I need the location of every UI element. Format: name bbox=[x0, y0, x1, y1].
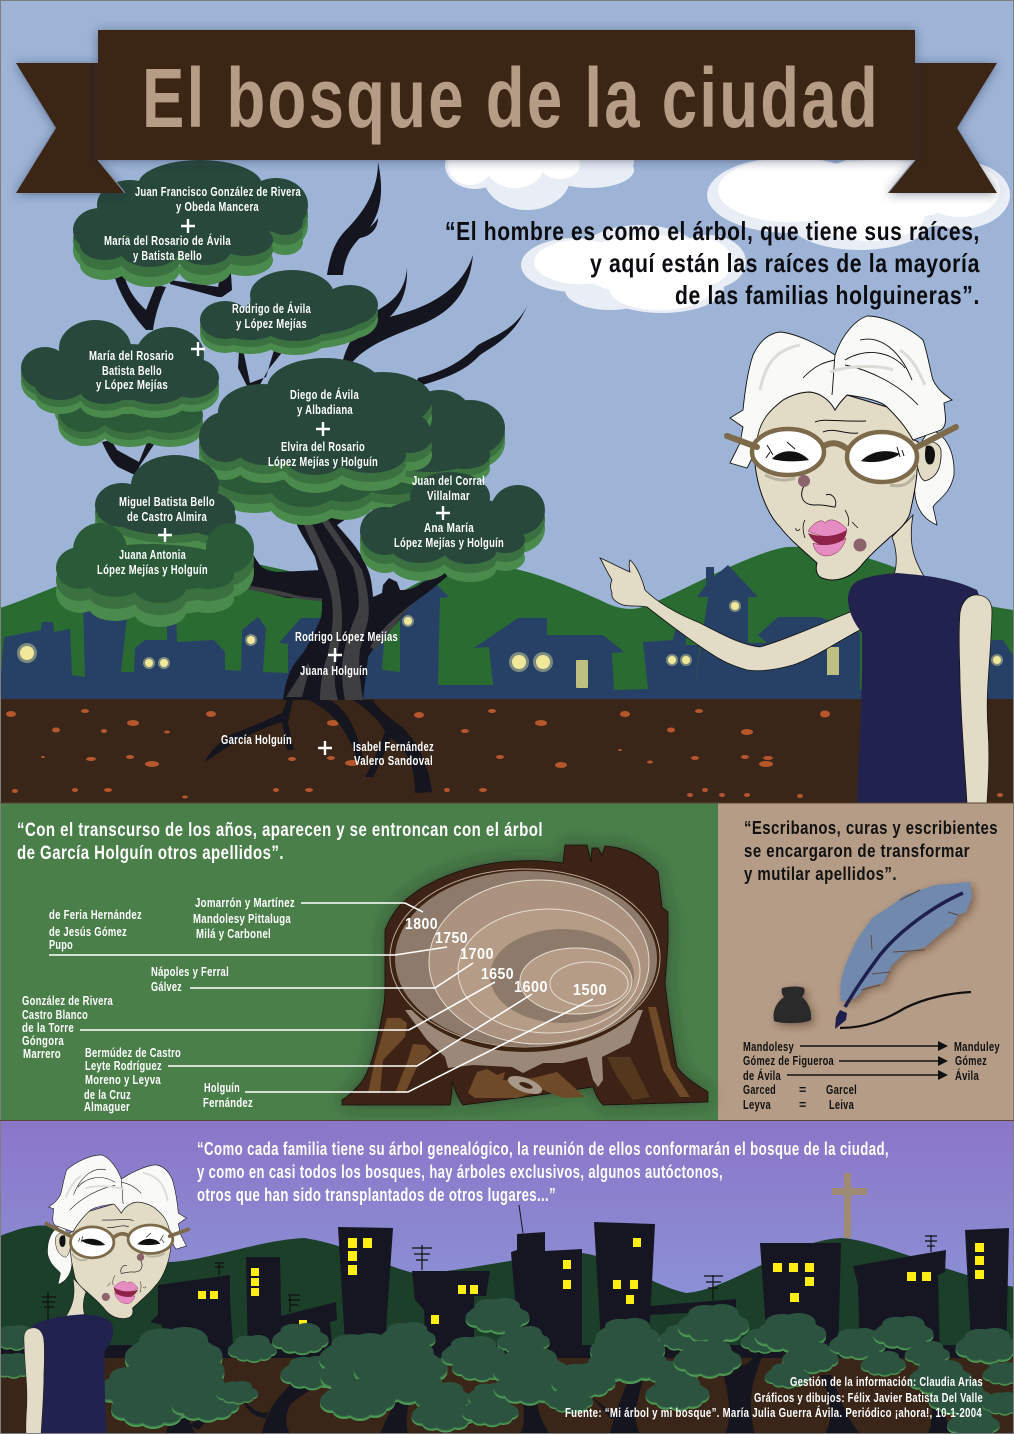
surname mutations bbox=[743, 1040, 1000, 1112]
city: soil bbox=[0, 1358, 1014, 1434]
surname mutations: Manduley bbox=[954, 1040, 1000, 1054]
city: lit windows bbox=[198, 1238, 984, 1329]
city: cross on hill bbox=[832, 1173, 867, 1238]
family tree names: Diego de Ávila bbox=[290, 387, 360, 402]
clouds bbox=[445, 140, 1010, 313]
family tree names: María del Rosario de Ávila bbox=[104, 233, 232, 248]
surname labels: Marrero bbox=[23, 1047, 61, 1061]
house windows bbox=[17, 600, 1003, 688]
city quote: otros que han sido transplantados de otros lugares...” bbox=[197, 1185, 556, 1205]
family tree names: Villalmar bbox=[427, 489, 470, 503]
surname labels: Almaguer bbox=[84, 1100, 130, 1114]
surname mutations: = bbox=[799, 1083, 807, 1097]
ring years: 1600 bbox=[514, 979, 548, 996]
surname mutations: Gómez de Figueroa bbox=[743, 1054, 834, 1068]
surname mutations: Leyva bbox=[743, 1098, 771, 1112]
hills bbox=[0, 547, 1014, 700]
surname labels bbox=[22, 896, 295, 1114]
ring years: 1700 bbox=[460, 946, 494, 963]
surname labels: Gálvez bbox=[151, 980, 182, 994]
family tree names: Miguel Batista Bello bbox=[119, 495, 215, 509]
panel: green stump panel bbox=[0, 803, 718, 1120]
family tree names: y López Mejías bbox=[236, 317, 307, 331]
foliage: Juana Antonia crown bbox=[56, 523, 254, 627]
soil bbox=[0, 699, 1014, 803]
panel: purple city panel bbox=[0, 1121, 1014, 1434]
surname mutations: Garcel bbox=[826, 1083, 857, 1097]
ring years: 1650 bbox=[481, 966, 514, 983]
city quote: y como en casi todos los bosques, hay árboles exclusivos, algunos autóctonos, bbox=[197, 1162, 723, 1182]
family tree names: García Holguín bbox=[221, 733, 292, 747]
surname labels: Jomarrón y Martínez bbox=[195, 896, 295, 910]
family tree names: Juana Antonia bbox=[119, 548, 186, 562]
surname labels: de la Cruz bbox=[84, 1088, 131, 1102]
family tree names: Valero Sandoval bbox=[354, 754, 433, 768]
tan panel heading bbox=[744, 818, 998, 884]
surname leader lines bbox=[49, 903, 593, 1092]
foliage: right crown bbox=[360, 472, 545, 582]
tan panel heading: y mutilar apellidos”. bbox=[744, 864, 897, 884]
surname mutations: Gómez bbox=[955, 1054, 987, 1068]
foliage: left crown bbox=[21, 320, 219, 447]
character: woman pointing bbox=[600, 316, 992, 803]
surname mutations: de Ávila bbox=[743, 1068, 782, 1083]
tan panel heading: se encargaron de transformar bbox=[744, 841, 970, 861]
surname labels: Bermúdez de Castro bbox=[85, 1046, 181, 1060]
soil pebbles bbox=[6, 709, 1003, 798]
ring years: 1800 bbox=[405, 916, 438, 933]
family tree names: López Mejías y Holguín bbox=[394, 536, 504, 550]
city: forest of trees bbox=[0, 1298, 1014, 1434]
surname mutations: Mandolesy bbox=[743, 1040, 794, 1054]
city quote bbox=[197, 1139, 889, 1205]
surname labels: González de Rivera bbox=[22, 994, 114, 1008]
family tree names: Batista Bello bbox=[102, 364, 162, 378]
main quote bbox=[445, 216, 980, 310]
green panel heading bbox=[17, 820, 543, 864]
surname labels: Castro Blanco bbox=[22, 1008, 88, 1022]
surname labels: de Jesús Gómez bbox=[49, 925, 127, 939]
green panel heading: “Con el transcurso de los años, aparecen y se entroncan con el árbol bbox=[17, 820, 543, 841]
family tree names: Juan del Corral bbox=[412, 474, 485, 488]
panel: tan scribes panel bbox=[718, 803, 1014, 1120]
ring years bbox=[405, 916, 607, 999]
ink stroke bbox=[840, 992, 971, 1028]
family tree names: María del Rosario bbox=[89, 349, 174, 363]
family tree names: Ana María bbox=[424, 521, 475, 535]
surname labels: Mandolesy Pittaluga bbox=[193, 912, 292, 926]
family tree names: Juana Holguín bbox=[300, 664, 368, 678]
surname labels: Holguín bbox=[204, 1081, 240, 1095]
tree: trunk, branches and roots bbox=[102, 162, 527, 793]
surname mutations: Leiva bbox=[829, 1098, 854, 1112]
foliage: Rodrigo crown bbox=[200, 270, 378, 355]
foliage: central crown bbox=[199, 358, 505, 525]
surname labels: Fernández bbox=[203, 1096, 253, 1110]
character: woman in city panel bbox=[24, 1155, 188, 1434]
icon: feather and quill bbox=[835, 882, 972, 1029]
family tree names: y López Mejías bbox=[96, 378, 168, 392]
ring years: 1750 bbox=[435, 930, 468, 947]
sky background bbox=[0, 0, 1014, 803]
surname labels: de Feria Hernández bbox=[49, 908, 142, 922]
tree stump bbox=[342, 845, 708, 1105]
surname labels: Moreno y Leyva bbox=[85, 1073, 162, 1087]
family tree names: de Castro Almira bbox=[127, 510, 208, 524]
credits bbox=[565, 1375, 983, 1420]
family tree names: y Albadiana bbox=[297, 403, 354, 417]
title ribbon bbox=[16, 30, 997, 193]
pointing arm bbox=[600, 558, 860, 671]
city: buildings bbox=[0, 1205, 1014, 1360]
surname labels: Nápoles y Ferral bbox=[151, 965, 229, 979]
surname labels: Milá y Carbonel bbox=[196, 927, 271, 941]
ring years: 1500 bbox=[573, 982, 607, 999]
surname mutations: Ávila bbox=[955, 1068, 979, 1083]
foliage: Miguel crown bbox=[95, 455, 236, 552]
family tree names: y Obeda Mancera bbox=[176, 200, 260, 214]
family tree names: y Batista Bello bbox=[133, 249, 202, 263]
surname labels: de la Torre bbox=[22, 1021, 74, 1035]
surname labels: Góngora bbox=[22, 1034, 65, 1048]
family tree names: López Mejías y Holguín bbox=[97, 563, 208, 577]
foliage: upper left crown bbox=[73, 160, 308, 287]
city: hills bbox=[0, 1225, 1014, 1370]
family tree names: Juan Francisco González de Rivera bbox=[135, 185, 302, 199]
family tree names: Isabel Fernández bbox=[353, 740, 434, 754]
houses skyline bbox=[0, 565, 1014, 700]
icon: ink bottle bbox=[774, 986, 811, 1023]
surname mutations: Garced bbox=[743, 1083, 776, 1097]
surname labels: Pupo bbox=[49, 938, 73, 952]
family tree names bbox=[89, 185, 504, 768]
family tree names: Rodrigo de Ávila bbox=[232, 301, 311, 316]
surname labels: Leyte Rodríguez bbox=[85, 1059, 162, 1073]
family tree names: Elvira del Rosario bbox=[281, 440, 365, 454]
surname mutations: = bbox=[799, 1098, 807, 1112]
city: trunks of forest bbox=[135, 1345, 952, 1434]
family tree names: López Mejías y Holguín bbox=[268, 455, 378, 469]
green panel heading: de García Holguín otros apellidos”. bbox=[17, 843, 284, 864]
family tree names: Rodrigo López Mejías bbox=[295, 630, 398, 644]
